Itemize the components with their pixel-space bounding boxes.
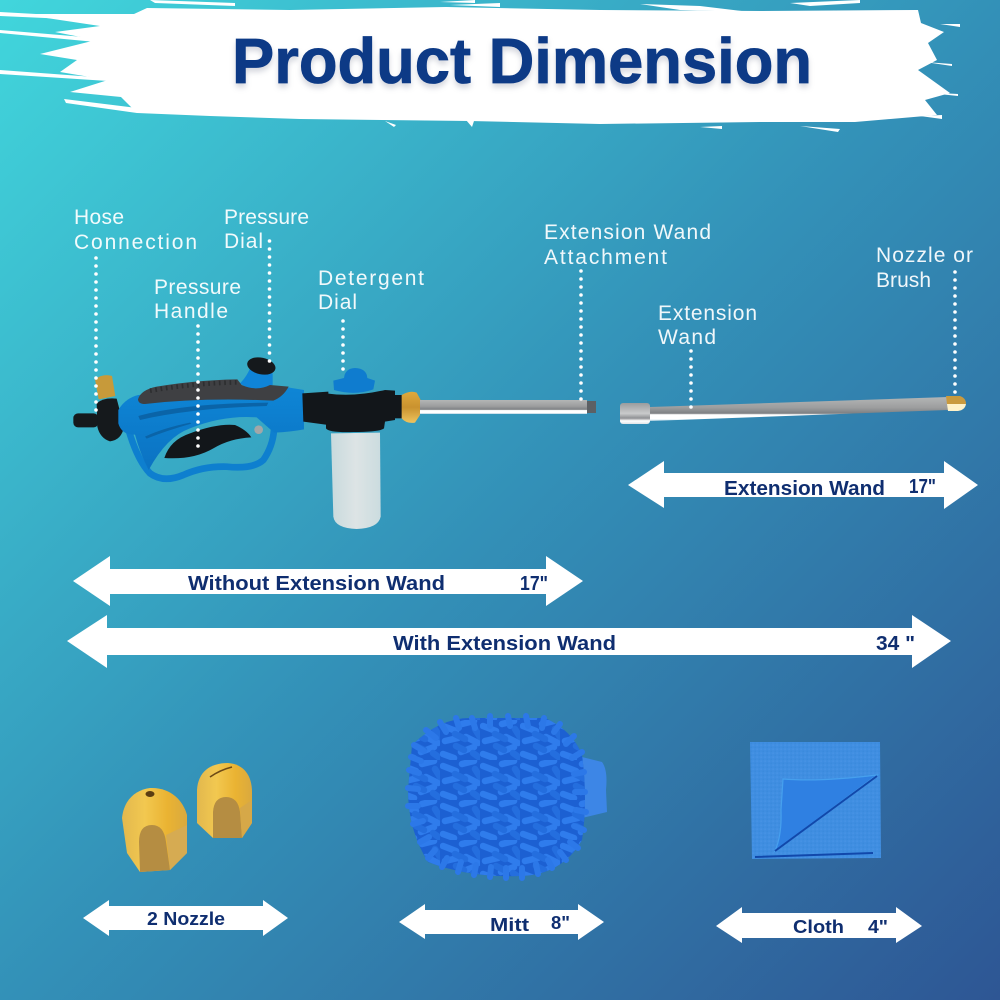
label: nozzle or brush: Nozzle or — [876, 244, 973, 267]
mitt body — [408, 718, 585, 876]
steel wand — [420, 400, 587, 414]
fringe — [408, 716, 586, 878]
pressure dial — [240, 355, 277, 390]
brass coupler — [402, 392, 421, 423]
chenille texture — [408, 718, 585, 876]
microfiber cloth — [750, 742, 881, 859]
label: hose connection — [74, 206, 197, 254]
arrow: extension wand 17 in: 17" — [909, 476, 936, 498]
extension tube — [650, 397, 948, 421]
extension wand — [620, 396, 966, 424]
nozzles — [122, 763, 252, 872]
arrow: mitt 8 in — [399, 904, 604, 940]
main wand section — [420, 400, 596, 414]
label: pressure dial — [224, 206, 309, 253]
arrow: extension wand 17 in — [628, 461, 978, 509]
label: nozzle or brush — [876, 244, 973, 292]
arrow: cloth 4 in — [716, 907, 922, 943]
label: hose connection: Hose — [74, 206, 124, 229]
barrel black sections — [302, 390, 403, 432]
arrow: with extension wand 34 in — [67, 615, 951, 668]
label: extension wand attachment: Attachment — [544, 246, 667, 269]
label: pressure handle: Handle — [154, 300, 228, 323]
spray gun — [73, 355, 421, 529]
label: detergent dial: Detergent — [318, 267, 424, 290]
wrist band — [578, 756, 607, 818]
grey rubber grip — [138, 379, 289, 404]
coupling — [620, 403, 650, 424]
cloth square — [750, 742, 881, 859]
gun body — [118, 387, 304, 470]
black trigger — [164, 425, 251, 458]
arrow: extension wand 17 in: Extension Wand — [724, 478, 885, 500]
brass tip — [946, 396, 966, 411]
arrow: with extension wand 34 in: 34 " — [876, 633, 915, 655]
folded corner — [775, 775, 877, 851]
label: pressure handle: Pressure — [154, 276, 241, 299]
chenille mitt — [408, 716, 607, 878]
arrow: mitt 8 in: 8" — [551, 913, 570, 933]
arrow: cloth 4 in: 4" — [868, 917, 888, 937]
arrow: mitt 8 in: Mitt — [490, 915, 529, 935]
arrow: 2 nozzle: 2 Nozzle — [147, 909, 225, 929]
trigger guard — [129, 430, 274, 479]
label: extension wand: Wand — [658, 326, 716, 349]
label: pressure dial: Dial — [224, 230, 263, 253]
left nozzle — [122, 788, 187, 872]
detergent bottle — [331, 433, 381, 529]
grip ribs — [150, 382, 237, 391]
white brush stroke banner — [0, 0, 960, 132]
gap between body and lever — [145, 423, 191, 439]
label: extension wand attachment — [544, 221, 711, 269]
pivot screw — [254, 425, 263, 434]
inner slot — [138, 403, 268, 420]
label: detergent dial — [318, 267, 424, 314]
label: extension wand attachment: Extension Wand — [544, 221, 711, 244]
label: pressure dial: Pressure — [224, 206, 309, 229]
label: extension wand: Extension — [658, 302, 757, 325]
arrow: with extension wand 34 in: With Extension Wand — [393, 633, 616, 655]
right nozzle — [197, 763, 252, 838]
fold shadow — [755, 776, 877, 857]
threaded end — [587, 401, 596, 413]
detergent dial cap — [333, 368, 375, 393]
arrow: without extension wand 17 in: 17" — [520, 573, 548, 595]
arrow: cloth 4 in: Cloth — [793, 917, 844, 937]
arrow: without extension wand 17 in — [73, 556, 583, 606]
dotted leader lines — [96, 241, 955, 447]
label: detergent dial: Dial — [318, 291, 357, 314]
label: extension wand — [658, 302, 757, 349]
label: pressure handle — [154, 276, 241, 323]
arrow: 2 nozzle — [83, 900, 288, 936]
arrow: without extension wand 17 in: Without Extension Wand — [188, 573, 445, 595]
label: hose connection: Connection — [74, 231, 197, 254]
hose connector — [73, 398, 124, 441]
brass hose fitting — [95, 375, 115, 399]
title: Product Dimension — [232, 25, 812, 97]
label: nozzle or brush: Brush — [876, 269, 931, 292]
